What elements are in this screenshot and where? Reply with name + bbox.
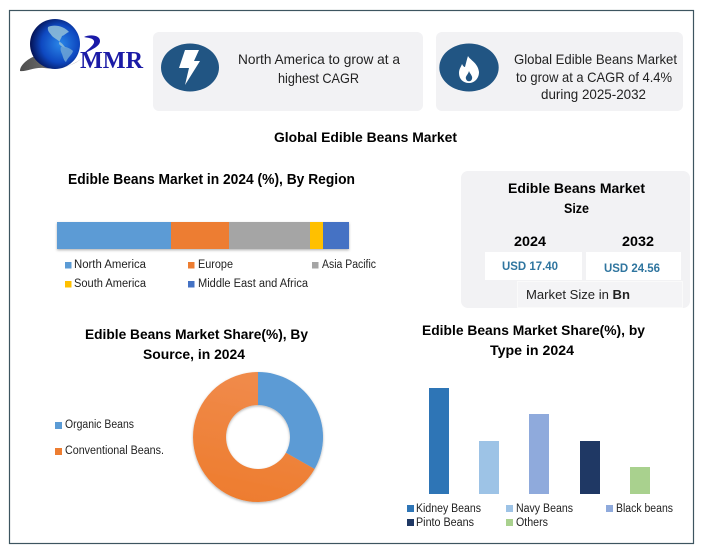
heading: Edible Beans Market — [508, 180, 645, 196]
unit note — [518, 282, 682, 308]
callout card: Global CAGR — [436, 32, 683, 111]
heading: Edible Beans Market Share(%), By — [85, 326, 308, 342]
legend: Conventional Beans. — [65, 445, 164, 457]
legend — [65, 259, 376, 290]
heading: Type in 2024 — [490, 342, 574, 358]
callout text: North America to grow at a — [238, 51, 400, 67]
callout text: to grow at a CAGR of 4.4% — [516, 69, 672, 85]
legend — [407, 503, 673, 529]
logo: MMR globe — [20, 19, 144, 74]
stacked bar chart — [57, 222, 349, 249]
bar chart — [429, 388, 650, 494]
legend: Black beans — [616, 503, 673, 515]
legend: Organic Beans — [65, 419, 134, 431]
year 2024 value: USD 17.40 — [502, 261, 558, 273]
legend: Middle East and Africa — [198, 278, 309, 290]
year 2024 value: 2024 — [514, 233, 546, 249]
year 2024 value — [485, 233, 582, 280]
callout text: during 2025-2032 — [541, 86, 646, 102]
legend — [55, 419, 164, 457]
callout text: Global Edible Beans Market — [514, 51, 677, 67]
heading: Edible Beans Market in 2024 (%), By Region — [68, 172, 355, 188]
year 2032 value: USD 24.56 — [604, 263, 660, 275]
icon: lightning bolt — [161, 44, 219, 92]
heading — [85, 326, 308, 362]
callout text: highest CAGR — [278, 70, 359, 86]
legend: Europe — [198, 259, 233, 271]
callout card: North America — [153, 32, 423, 111]
legend: South America — [74, 278, 147, 290]
icon: flame — [439, 44, 499, 92]
legend: North America — [74, 259, 147, 271]
callout text — [238, 51, 400, 86]
panel: donut by source — [55, 326, 323, 502]
logo: MMR globe: MMR — [80, 48, 144, 74]
panel: stacked bar by region — [57, 172, 376, 290]
heading: Edible Beans Market Share(%), by — [422, 322, 645, 338]
legend: Kidney Beans — [416, 503, 481, 515]
heading: Source, in 2024 — [143, 346, 245, 362]
heading — [508, 180, 645, 216]
heading — [422, 322, 645, 358]
callout text — [514, 51, 677, 102]
panel: market size — [461, 171, 690, 308]
year 2032 value — [586, 233, 681, 280]
panel: bar chart by type — [407, 322, 673, 529]
legend: Navy Beans — [516, 503, 573, 515]
donut chart — [193, 372, 323, 502]
unit note: Market Size in Bn — [526, 287, 630, 302]
legend: Others — [516, 517, 548, 529]
title: Global Edible Beans Market — [274, 129, 457, 145]
legend: Asia Pacific — [322, 259, 376, 271]
legend: Pinto Beans — [416, 517, 474, 529]
year 2032 value: 2032 — [622, 233, 654, 249]
heading: Size — [564, 200, 589, 216]
